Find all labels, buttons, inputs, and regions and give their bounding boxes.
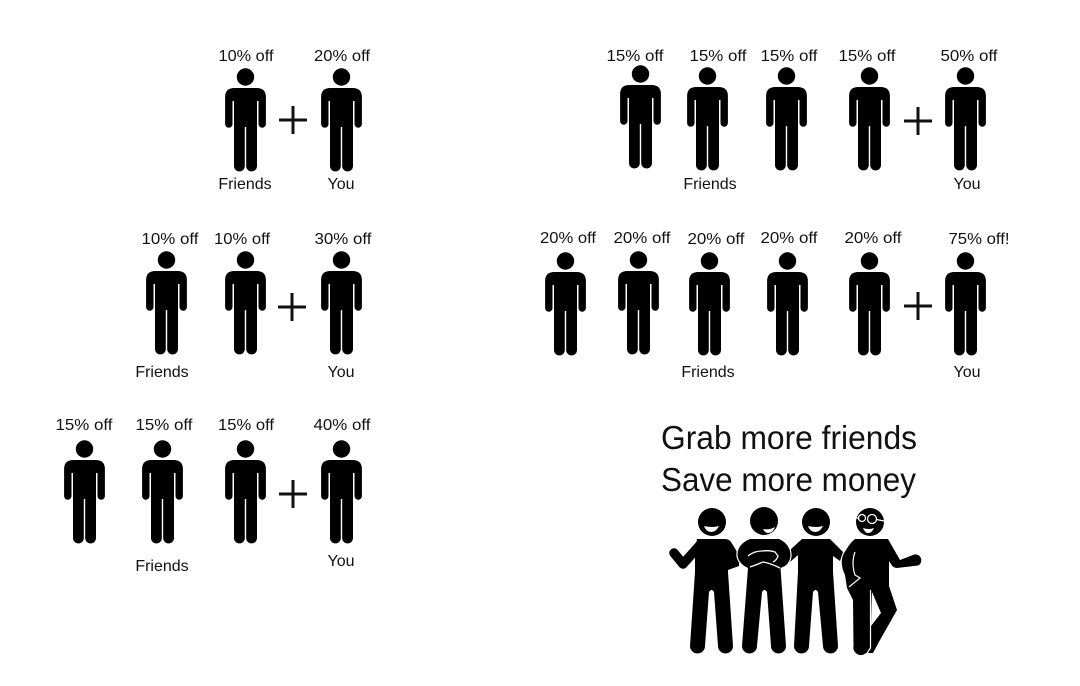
discount labels: 20% off — [844, 230, 902, 247]
group labels — [135, 364, 354, 381]
headline: Save more money — [661, 461, 916, 498]
friend 4: glasses, leaning — [842, 508, 921, 655]
discount labels: 20% off — [314, 48, 371, 65]
discount labels: 15% off — [838, 48, 896, 65]
scenario: five friends, 75% off — [540, 230, 1010, 381]
discount labels: 10% off — [218, 48, 274, 65]
plus sign — [904, 107, 932, 135]
group labels: Friends — [135, 364, 189, 381]
discount labels: 75% off! — [948, 231, 1010, 248]
group labels: You — [954, 176, 980, 193]
discount labels: 10% off — [142, 231, 199, 248]
scenario: two friends, 30% off — [135, 231, 372, 381]
discount labels: 15% off — [606, 48, 664, 65]
discount labels: 15% off — [690, 48, 747, 65]
discount labels — [540, 230, 1010, 248]
people — [146, 251, 362, 354]
friend 1: waving — [674, 508, 739, 654]
plus sign — [279, 106, 307, 134]
group labels: Friends — [218, 176, 272, 193]
friend 2: arms crossed — [738, 507, 790, 654]
group labels — [681, 364, 980, 381]
illustration: four happy friends — [674, 507, 921, 655]
group labels: Friends — [683, 176, 737, 193]
group labels — [683, 176, 980, 193]
scenario: three friends, 40% off — [56, 417, 371, 575]
group labels: You — [954, 364, 980, 381]
headline: Grab more friends — [661, 419, 917, 456]
people — [620, 65, 986, 170]
discount labels: 40% off — [314, 417, 371, 434]
discount labels — [218, 48, 371, 65]
scenario: one friend, 20% off — [218, 48, 371, 193]
plus sign — [278, 293, 306, 321]
discount labels — [606, 48, 998, 65]
discount labels: 15% off — [136, 417, 193, 434]
discount labels: 20% off — [540, 230, 597, 247]
group labels — [135, 553, 354, 575]
group labels: You — [328, 176, 354, 193]
scenario: four friends, 50% off — [606, 48, 998, 193]
discount labels: 20% off — [614, 230, 671, 247]
people — [64, 440, 362, 543]
group labels: You — [328, 553, 354, 570]
group labels: Friends — [135, 558, 189, 575]
discount labels: 15% off — [56, 417, 113, 434]
discount labels: 15% off — [218, 417, 275, 434]
discount labels: 15% off — [760, 48, 818, 65]
headline — [661, 419, 917, 498]
discount labels — [56, 417, 371, 434]
discount labels: 20% off — [688, 231, 745, 248]
people — [545, 251, 986, 355]
discount labels — [142, 231, 372, 248]
group labels — [218, 176, 354, 193]
friend 3: arms out — [790, 508, 843, 654]
discount labels: 20% off — [760, 230, 818, 247]
plus sign — [279, 480, 307, 508]
people — [225, 68, 362, 171]
plus sign — [904, 292, 932, 320]
group labels: Friends — [681, 364, 735, 381]
glasses — [856, 514, 884, 524]
discount labels: 50% off — [940, 48, 998, 65]
group labels: You — [328, 364, 354, 381]
discount labels: 10% off — [214, 231, 271, 248]
discount labels: 30% off — [314, 231, 372, 248]
